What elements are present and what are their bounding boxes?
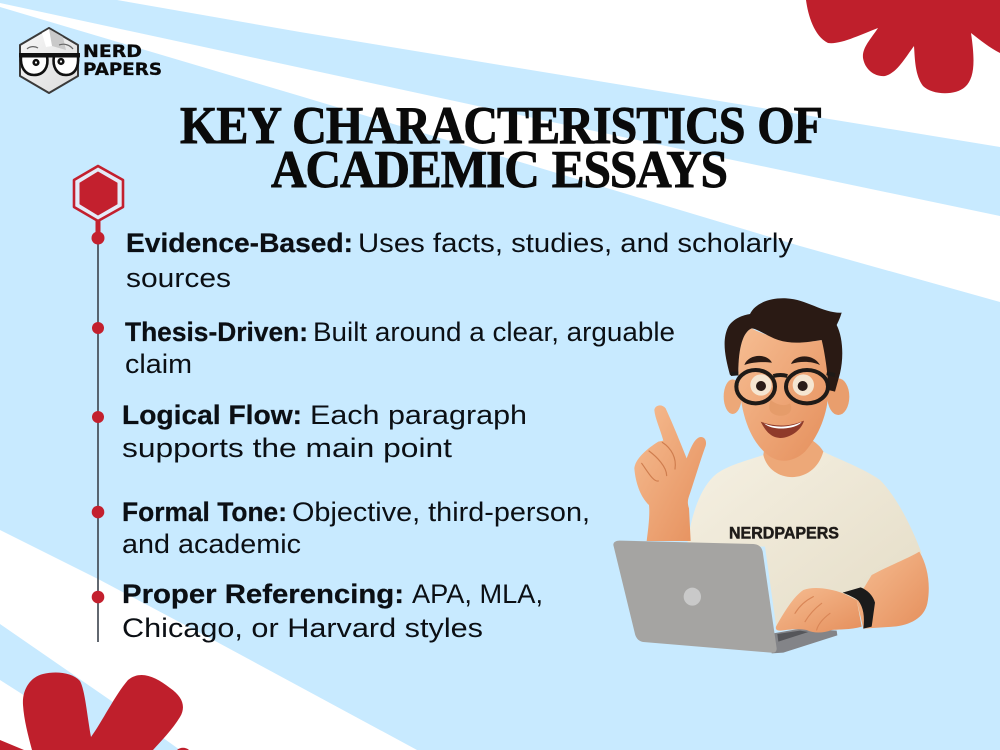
item: Proper Referencing: APA, MLA,	[412, 579, 543, 609]
item: Formal Tone: Objective, third-person,	[292, 497, 590, 527]
smartwatch	[843, 587, 875, 629]
pointing hand and forearm	[634, 405, 706, 541]
typing hand	[776, 588, 862, 632]
logo wordmark: PAPERS	[83, 60, 162, 79]
illustration: student with laptop	[613, 298, 929, 653]
item: Evidence-Based	[126, 228, 794, 293]
timeline	[74, 166, 123, 642]
item: Logical Flow: Logical Flow:	[122, 400, 302, 430]
shirt	[687, 452, 922, 630]
neck	[763, 440, 823, 477]
eyes	[750, 374, 772, 396]
item: Formal Tone	[122, 497, 590, 559]
red blob: bottom left	[0, 672, 189, 750]
head	[724, 298, 849, 461]
face	[738, 328, 828, 461]
mouth	[761, 421, 804, 438]
hair	[725, 298, 842, 392]
eyebrows	[744, 356, 820, 365]
right arm	[857, 552, 929, 629]
item: Logical Flow: Each paragraph	[310, 400, 527, 430]
item: Thesis-Driven: Thesis-Driven:	[125, 317, 308, 347]
item: Evidence-Based: Uses facts, studies, and scholarly	[358, 228, 794, 258]
title	[180, 97, 822, 199]
item: Proper Referencing: Chicago, or Harvard styles	[122, 613, 483, 643]
logo: Nerd Papers	[19, 28, 162, 93]
glasses	[736, 370, 775, 403]
item: Proper Referencing	[122, 579, 543, 643]
red blob: top right	[806, 0, 1000, 93]
item: Evidence-Based: sources	[126, 263, 231, 293]
item: Evidence-Based: Evidence-Based:	[126, 228, 353, 258]
logo hexagon mascot	[19, 28, 80, 93]
laptop logo	[684, 588, 701, 606]
timeline hexagon marker	[74, 166, 123, 235]
item: Thesis-Driven: Built around a clear, arguable	[313, 317, 675, 347]
item: Formal Tone: Formal Tone:	[122, 497, 287, 527]
ears	[724, 379, 742, 414]
shirt print: NERDPAPERS	[729, 523, 839, 542]
item: Logical Flow	[122, 400, 527, 463]
item: Thesis-Driven	[125, 317, 675, 379]
laptop lid	[613, 541, 777, 653]
item: Proper Referencing: Proper Referencing:	[122, 579, 404, 609]
logo wordmark	[83, 42, 162, 79]
item: Logical Flow: supports the main point	[122, 433, 453, 463]
title: KEY CHARACTERISTICS OF	[180, 97, 822, 155]
item: Thesis-Driven: claim	[125, 349, 192, 379]
laptop base	[772, 628, 837, 653]
title: ACADEMIC ESSAYS	[271, 141, 727, 199]
logo wordmark: NERD	[83, 42, 142, 61]
item: Formal Tone: and academic	[122, 529, 301, 559]
nose	[769, 400, 791, 416]
